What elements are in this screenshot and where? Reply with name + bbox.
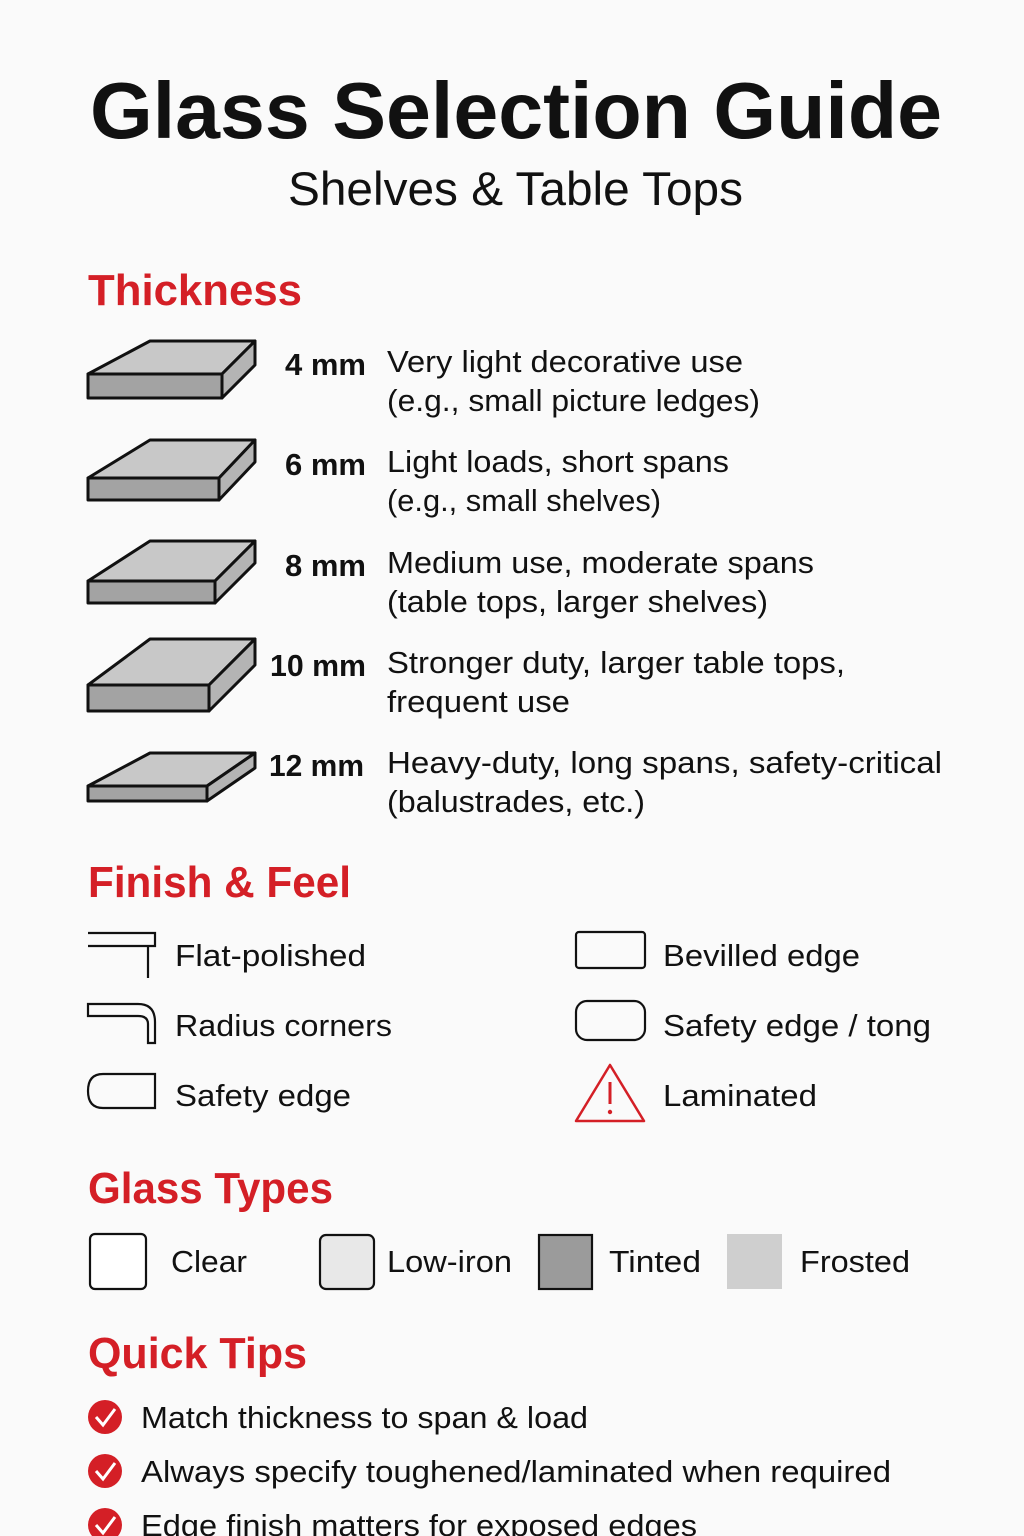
row: 6 mm: (e.g., small shelves)	[387, 483, 661, 518]
panel: thickness list	[88, 341, 942, 819]
item: laminated: Laminated	[663, 1078, 817, 1113]
swatch: low-iron	[320, 1235, 512, 1289]
row: 4 mm: Very light decorative use	[387, 344, 743, 379]
heading: Glass Types: Glass Types	[88, 1164, 333, 1213]
panel: finish options	[88, 932, 931, 1121]
row: 8 mm: Medium use, moderate spans	[387, 545, 814, 580]
row: 4 mm	[88, 341, 760, 418]
swatch: tinted	[539, 1235, 701, 1289]
row: 8 mm: 8 mm	[285, 548, 366, 583]
item: safety edge: Safety edge	[175, 1078, 351, 1113]
tip 1: Match thickness to span & load	[141, 1400, 588, 1435]
swatch: clear: Clear	[171, 1244, 247, 1279]
swatch: frosted	[727, 1234, 910, 1289]
item: safety edge / tong	[576, 1001, 931, 1043]
row: 12 mm: Heavy-duty, long spans, safety-critical	[387, 745, 942, 780]
item: bevilled edge: Bevilled edge	[663, 938, 860, 973]
item: safety edge	[88, 1074, 351, 1113]
heading: Quick Tips: Quick Tips	[88, 1329, 307, 1378]
item: radius corners	[88, 1004, 392, 1043]
swatch: clear	[90, 1234, 247, 1289]
heading: Thickness: Thickness	[88, 266, 302, 315]
row: 10 mm	[88, 639, 845, 719]
row: 6 mm: Light loads, short spans	[387, 444, 729, 479]
item: flat-polished	[88, 933, 366, 978]
row: 10 mm: Stronger duty, larger table tops,	[387, 645, 845, 680]
item: safety edge / tong: Safety edge / tong	[663, 1008, 931, 1043]
panel: quick tips	[88, 1400, 891, 1536]
row: 8 mm: (table tops, larger shelves)	[387, 584, 768, 619]
swatch: tinted: Tinted	[609, 1244, 701, 1279]
panel: glass types	[90, 1234, 910, 1289]
swatch: low-iron: Low-iron	[387, 1244, 512, 1279]
item: flat-polished: Flat-polished	[175, 938, 366, 973]
row: 12 mm: 12 mm	[269, 748, 364, 783]
row: 6 mm	[88, 440, 729, 518]
heading: Finish & Feel: Finish & Feel	[88, 858, 351, 907]
row: 8 mm	[88, 541, 814, 619]
item: laminated	[576, 1065, 817, 1121]
row: 4 mm: (e.g., small picture ledges)	[387, 383, 760, 418]
title: Glass Selection Guide	[90, 66, 942, 155]
row: 4 mm: 4 mm	[285, 347, 366, 382]
tip 2: Always specify toughened/laminated when required	[141, 1454, 891, 1489]
row: 12 mm: (balustrades, etc.)	[387, 784, 645, 819]
subtitle: Shelves & Table Tops	[288, 162, 743, 215]
item: bevilled edge	[576, 932, 860, 973]
row: 10 mm: frequent use	[387, 684, 570, 719]
item: radius corners: Radius corners	[175, 1008, 392, 1043]
row: 10 mm: 10 mm	[270, 648, 366, 683]
swatch: frosted: Frosted	[800, 1244, 910, 1279]
row: 6 mm: 6 mm	[285, 447, 366, 482]
row: 12 mm	[88, 745, 942, 819]
